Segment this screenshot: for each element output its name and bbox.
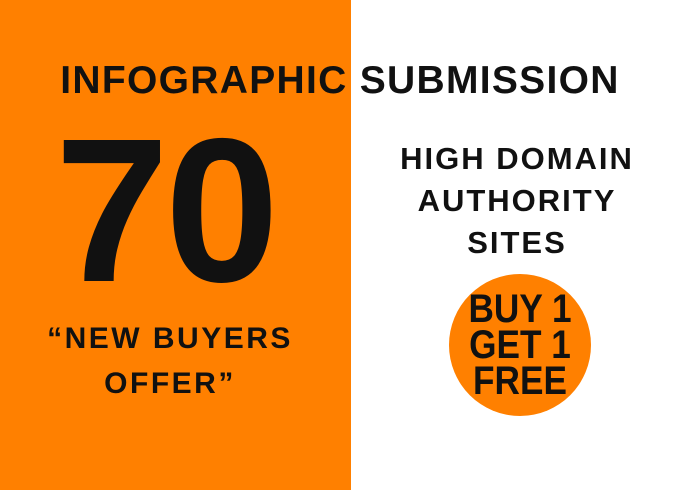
text: new buyers offer: “NEW BUYERS xyxy=(47,322,293,355)
big number 70: 70 xyxy=(55,96,275,325)
badge: buy 1 get 1 free: BUY 1 xyxy=(468,287,572,331)
badge: buy 1 get 1 free: FREE xyxy=(473,359,567,403)
title: INFOGRAPHIC SUBMISSION xyxy=(60,59,620,102)
text: high domain authority sites: HIGH DOMAIN xyxy=(400,141,634,176)
panel: orange left xyxy=(0,0,351,490)
text: new buyers offer: OFFER” xyxy=(104,367,236,400)
text: high domain authority sites: AUTHORITY xyxy=(418,183,616,218)
text: high domain authority sites xyxy=(400,141,634,260)
text: new buyers offer xyxy=(47,322,293,400)
badge: buy 1 get 1 free: GET 1 xyxy=(469,323,571,367)
text: high domain authority sites: SITES xyxy=(467,225,567,260)
badge: buy 1 get 1 free xyxy=(449,274,591,416)
